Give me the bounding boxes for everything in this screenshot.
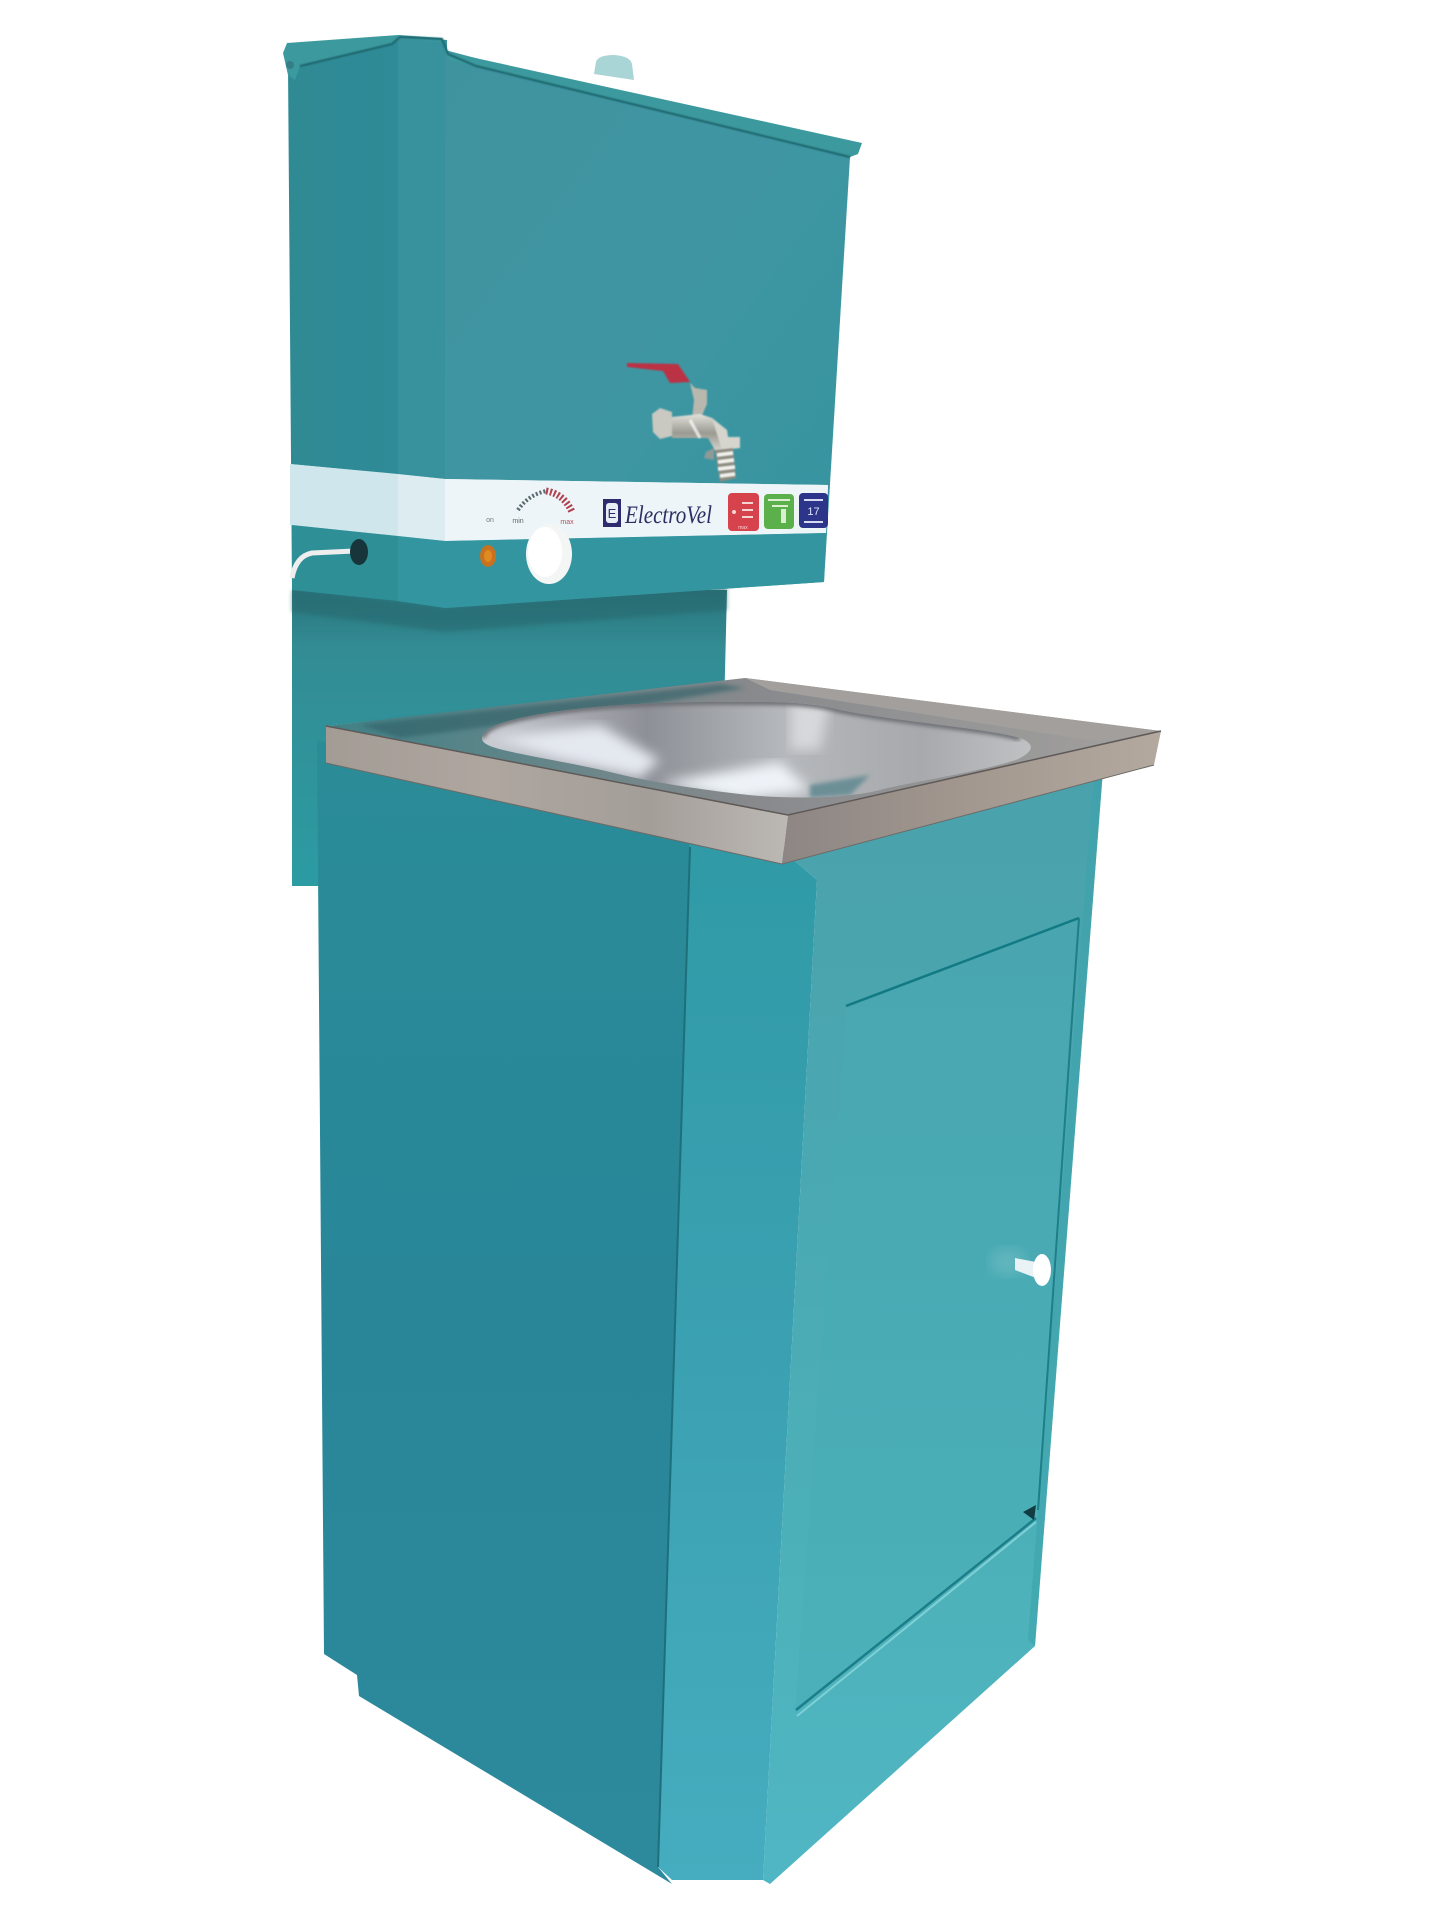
cabinet door	[795, 917, 1079, 1716]
logo: E	[608, 506, 617, 521]
sink right rim	[782, 731, 1161, 864]
red badge	[728, 493, 759, 531]
tank side face	[288, 38, 398, 597]
logo: ElectroVel	[624, 502, 712, 529]
cabinet front	[763, 770, 1103, 1884]
blue badge	[799, 493, 828, 528]
tank corner chamfer	[398, 36, 447, 608]
faucet	[627, 363, 740, 482]
door knob	[990, 1248, 1051, 1286]
label band	[290, 464, 828, 541]
green badge	[764, 494, 794, 529]
sink left rim	[326, 726, 788, 864]
sink top surface	[326, 678, 1161, 815]
sink bowl	[482, 700, 1031, 800]
tank cap	[594, 55, 634, 80]
water tank	[283, 35, 862, 608]
stainless steel sink	[326, 678, 1161, 864]
dial scale: on	[486, 517, 494, 524]
dial scale	[486, 491, 574, 526]
cabinet side	[317, 740, 690, 1884]
power cable	[292, 539, 368, 578]
temperature knob	[526, 524, 572, 584]
indicator light	[480, 545, 496, 567]
dial scale: max	[560, 519, 574, 526]
logo	[603, 499, 712, 529]
cabinet	[317, 740, 1103, 1884]
tank front face	[445, 50, 850, 608]
product illustration: wash basin unit	[283, 35, 1162, 1884]
tank lid	[283, 35, 862, 157]
lower tank band	[398, 533, 826, 608]
dial scale: min	[512, 518, 524, 525]
blue badge: 17	[807, 506, 820, 518]
cabinet chamfer	[658, 830, 817, 1880]
red badge: max	[738, 525, 748, 531]
backboard panel	[292, 585, 745, 886]
